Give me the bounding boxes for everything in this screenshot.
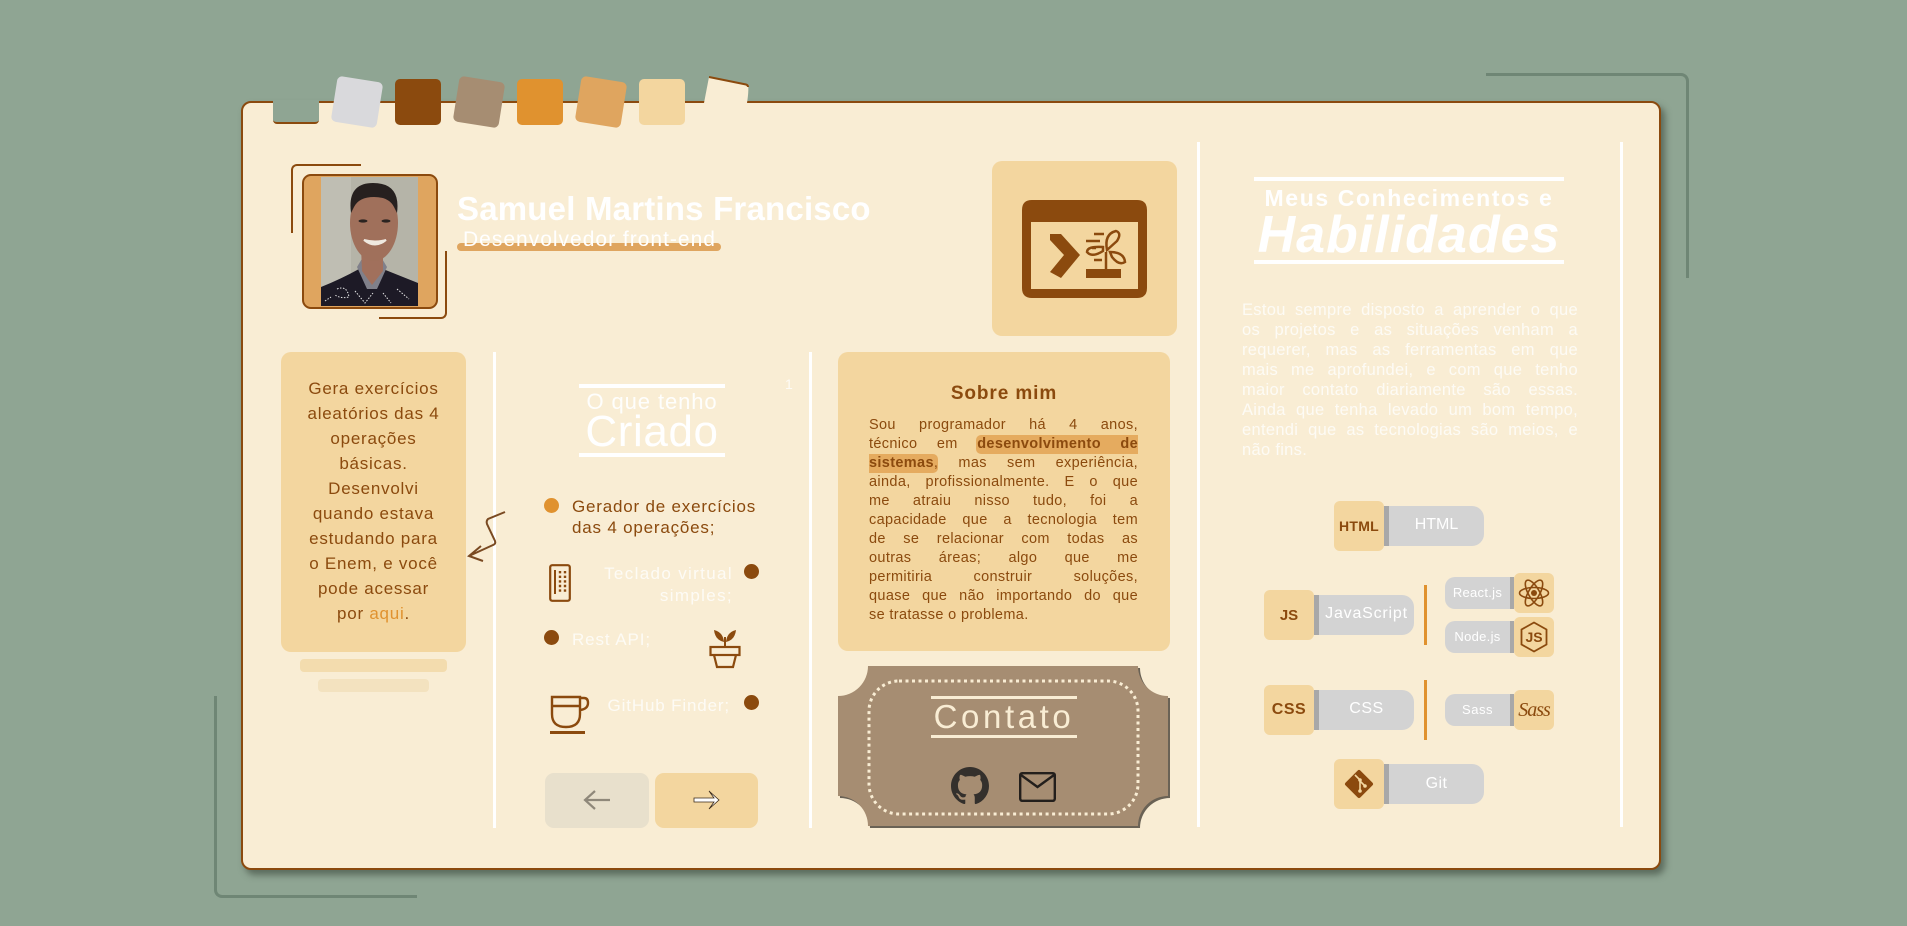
skill: CSS: [1264, 685, 1414, 735]
about text: de se relacionar com todas as: [869, 531, 1138, 547]
skill: React.js: React.js: [1453, 585, 1502, 600]
heading: contato: Contato: [934, 698, 1074, 735]
list item 1: das 4 operações;: [572, 518, 715, 537]
colour swatches: [332, 76, 749, 128]
about text: sistemas, mas sem experiência,: [869, 455, 1138, 471]
skills paragraph: entendi que as tecnologias são meios, e: [1242, 421, 1578, 439]
icon: react: [1518, 579, 1550, 607]
heading: sobre mim: Sobre mim: [951, 383, 1057, 404]
notch in card: [273, 100, 319, 124]
skills paragraph: [1242, 301, 1578, 459]
decorative bracket: top right: [1486, 73, 1689, 278]
project description text: operações: [330, 429, 417, 448]
list item 4: [550, 695, 759, 734]
list item 2: simples;: [660, 586, 733, 605]
about text: [869, 417, 1138, 623]
panel: contato ticket: [838, 666, 1170, 828]
skill: HTML: HTML: [1415, 516, 1458, 533]
list item 3: Rest API;: [572, 630, 651, 649]
icon: coffee cup: [550, 696, 590, 734]
icon: right arrow: [694, 790, 720, 810]
skill: JavaScript: JS: [1280, 606, 1298, 624]
project description text: Gera exercícios: [308, 379, 439, 398]
subtitle: Desenvolvedor front-end: [463, 228, 716, 251]
about text: técnico em desenvolvimento de: [869, 436, 1138, 452]
list item 4: GitHub Finder;: [608, 696, 730, 715]
skills paragraph: mais me aprofundei, e com que tenho: [1242, 361, 1578, 379]
skill: CSS: CSS: [1349, 700, 1384, 717]
skill: HTML: HTML: [1339, 518, 1379, 534]
section title: O que tenho Criado: O que tenho: [586, 389, 718, 414]
skills paragraph: requerer, mas as ferramentas em que: [1242, 341, 1578, 359]
list item 1: [544, 497, 756, 537]
icon: sass: Sass: [1518, 698, 1550, 720]
page number: 1: [785, 376, 793, 392]
project description text: quando estava: [313, 504, 434, 523]
list item 3: [544, 630, 741, 668]
section title: Meus Conhecimentos e Habilidades: [1254, 177, 1564, 264]
skill: HTML: [1334, 501, 1484, 551]
skill: CSS: CSS: [1272, 701, 1306, 718]
icon: mail: [1019, 772, 1056, 802]
icon: node hexagon: JS: [1525, 629, 1543, 645]
about text: se tratasse o problema.: [869, 607, 1029, 623]
card stack shadow 1: [300, 659, 447, 672]
icon: sass: [1514, 690, 1554, 730]
skill: Node.js: Node.js: [1454, 629, 1501, 644]
section title: O que tenho Criado: [579, 384, 725, 457]
project description text: aleatórios das 4: [307, 404, 440, 423]
panel: terminal icon card: [992, 161, 1177, 336]
skill: JavaScript: [1264, 590, 1414, 640]
section title: Meus Conhecimentos e Habilidades: Habilidades: [1258, 206, 1560, 264]
skill: Sass: [1445, 690, 1554, 730]
project description text: pode acessar: [318, 579, 429, 598]
project description text: [307, 379, 440, 623]
decorative bracket: bottom left: [214, 696, 417, 898]
subtitle underline: [457, 243, 721, 251]
list item 2: Teclado virtual: [604, 564, 733, 583]
skill divider: CSS: [1424, 680, 1427, 740]
name heading: Samuel Martins Francisco: [457, 190, 871, 227]
project description text: básicas.: [339, 454, 408, 473]
project description text: por aqui.: [337, 604, 410, 623]
panel: main paper card: [241, 101, 1661, 870]
icon: github: [951, 767, 989, 804]
skill: Git: [1334, 759, 1484, 809]
panel: sobre mim: [838, 352, 1170, 651]
about text: Sou programador há 4 anos,: [869, 417, 1138, 433]
icon: node hexagon: [1520, 622, 1548, 652]
project description text: estudando para: [309, 529, 438, 548]
skill: React.js: [1445, 573, 1554, 613]
skills paragraph: maior contato diariamente são essas.: [1242, 381, 1578, 399]
icon: keyboard: [549, 564, 571, 602]
icon: git diamond: [1344, 770, 1374, 798]
icon: potted plant: [709, 630, 741, 668]
skills paragraph: os projetos e as situações venham a: [1242, 321, 1578, 339]
list item 1: Gerador de exercícios: [572, 497, 756, 516]
about text: ainda, profissionalmente. E o que: [869, 474, 1138, 490]
section title: O que tenho Criado: Criado: [585, 407, 719, 456]
project description text: Desenvolvi: [328, 479, 419, 498]
skill: Sass: Sass: [1462, 702, 1493, 717]
project description text: o Enem, e você: [309, 554, 438, 573]
skills paragraph: Estou sempre disposto a aprender o que: [1242, 301, 1578, 319]
card stack shadow 2: [318, 679, 429, 692]
section title: Meus Conhecimentos e Habilidades: Meus Conhecimentos e: [1265, 185, 1553, 211]
skill: Git: Git: [1426, 775, 1447, 792]
profile photo bracket bottom-right: [379, 251, 447, 319]
about text: capacidade que a tecnologia tem: [869, 512, 1138, 528]
profile photo bracket top-left: [291, 164, 361, 233]
about text: quase que não importando do que: [869, 588, 1138, 604]
button: next: [655, 773, 758, 828]
profile photo: [302, 174, 438, 309]
button: previous: [545, 773, 649, 828]
skill divider: JS: [1424, 585, 1427, 645]
skill: JavaScript: JavaScript: [1325, 605, 1408, 622]
about text: permitiria construir soluções,: [869, 569, 1138, 585]
list item 2: [549, 564, 759, 605]
skill: Node.js: [1445, 617, 1554, 657]
arrow: squiggle pointing to description: [467, 511, 506, 562]
icon: terminal window with windmill: [1022, 200, 1147, 298]
about text: me atraiu nisso tudo, foi a: [869, 493, 1138, 509]
about text: outras áreas; algo que me: [869, 550, 1138, 566]
panel: project description: [281, 352, 466, 652]
skills paragraph: não fins.: [1242, 441, 1307, 459]
skills paragraph: Ainda que tenha levado um bom tempo,: [1242, 401, 1578, 419]
icon: left arrow: [584, 790, 610, 810]
